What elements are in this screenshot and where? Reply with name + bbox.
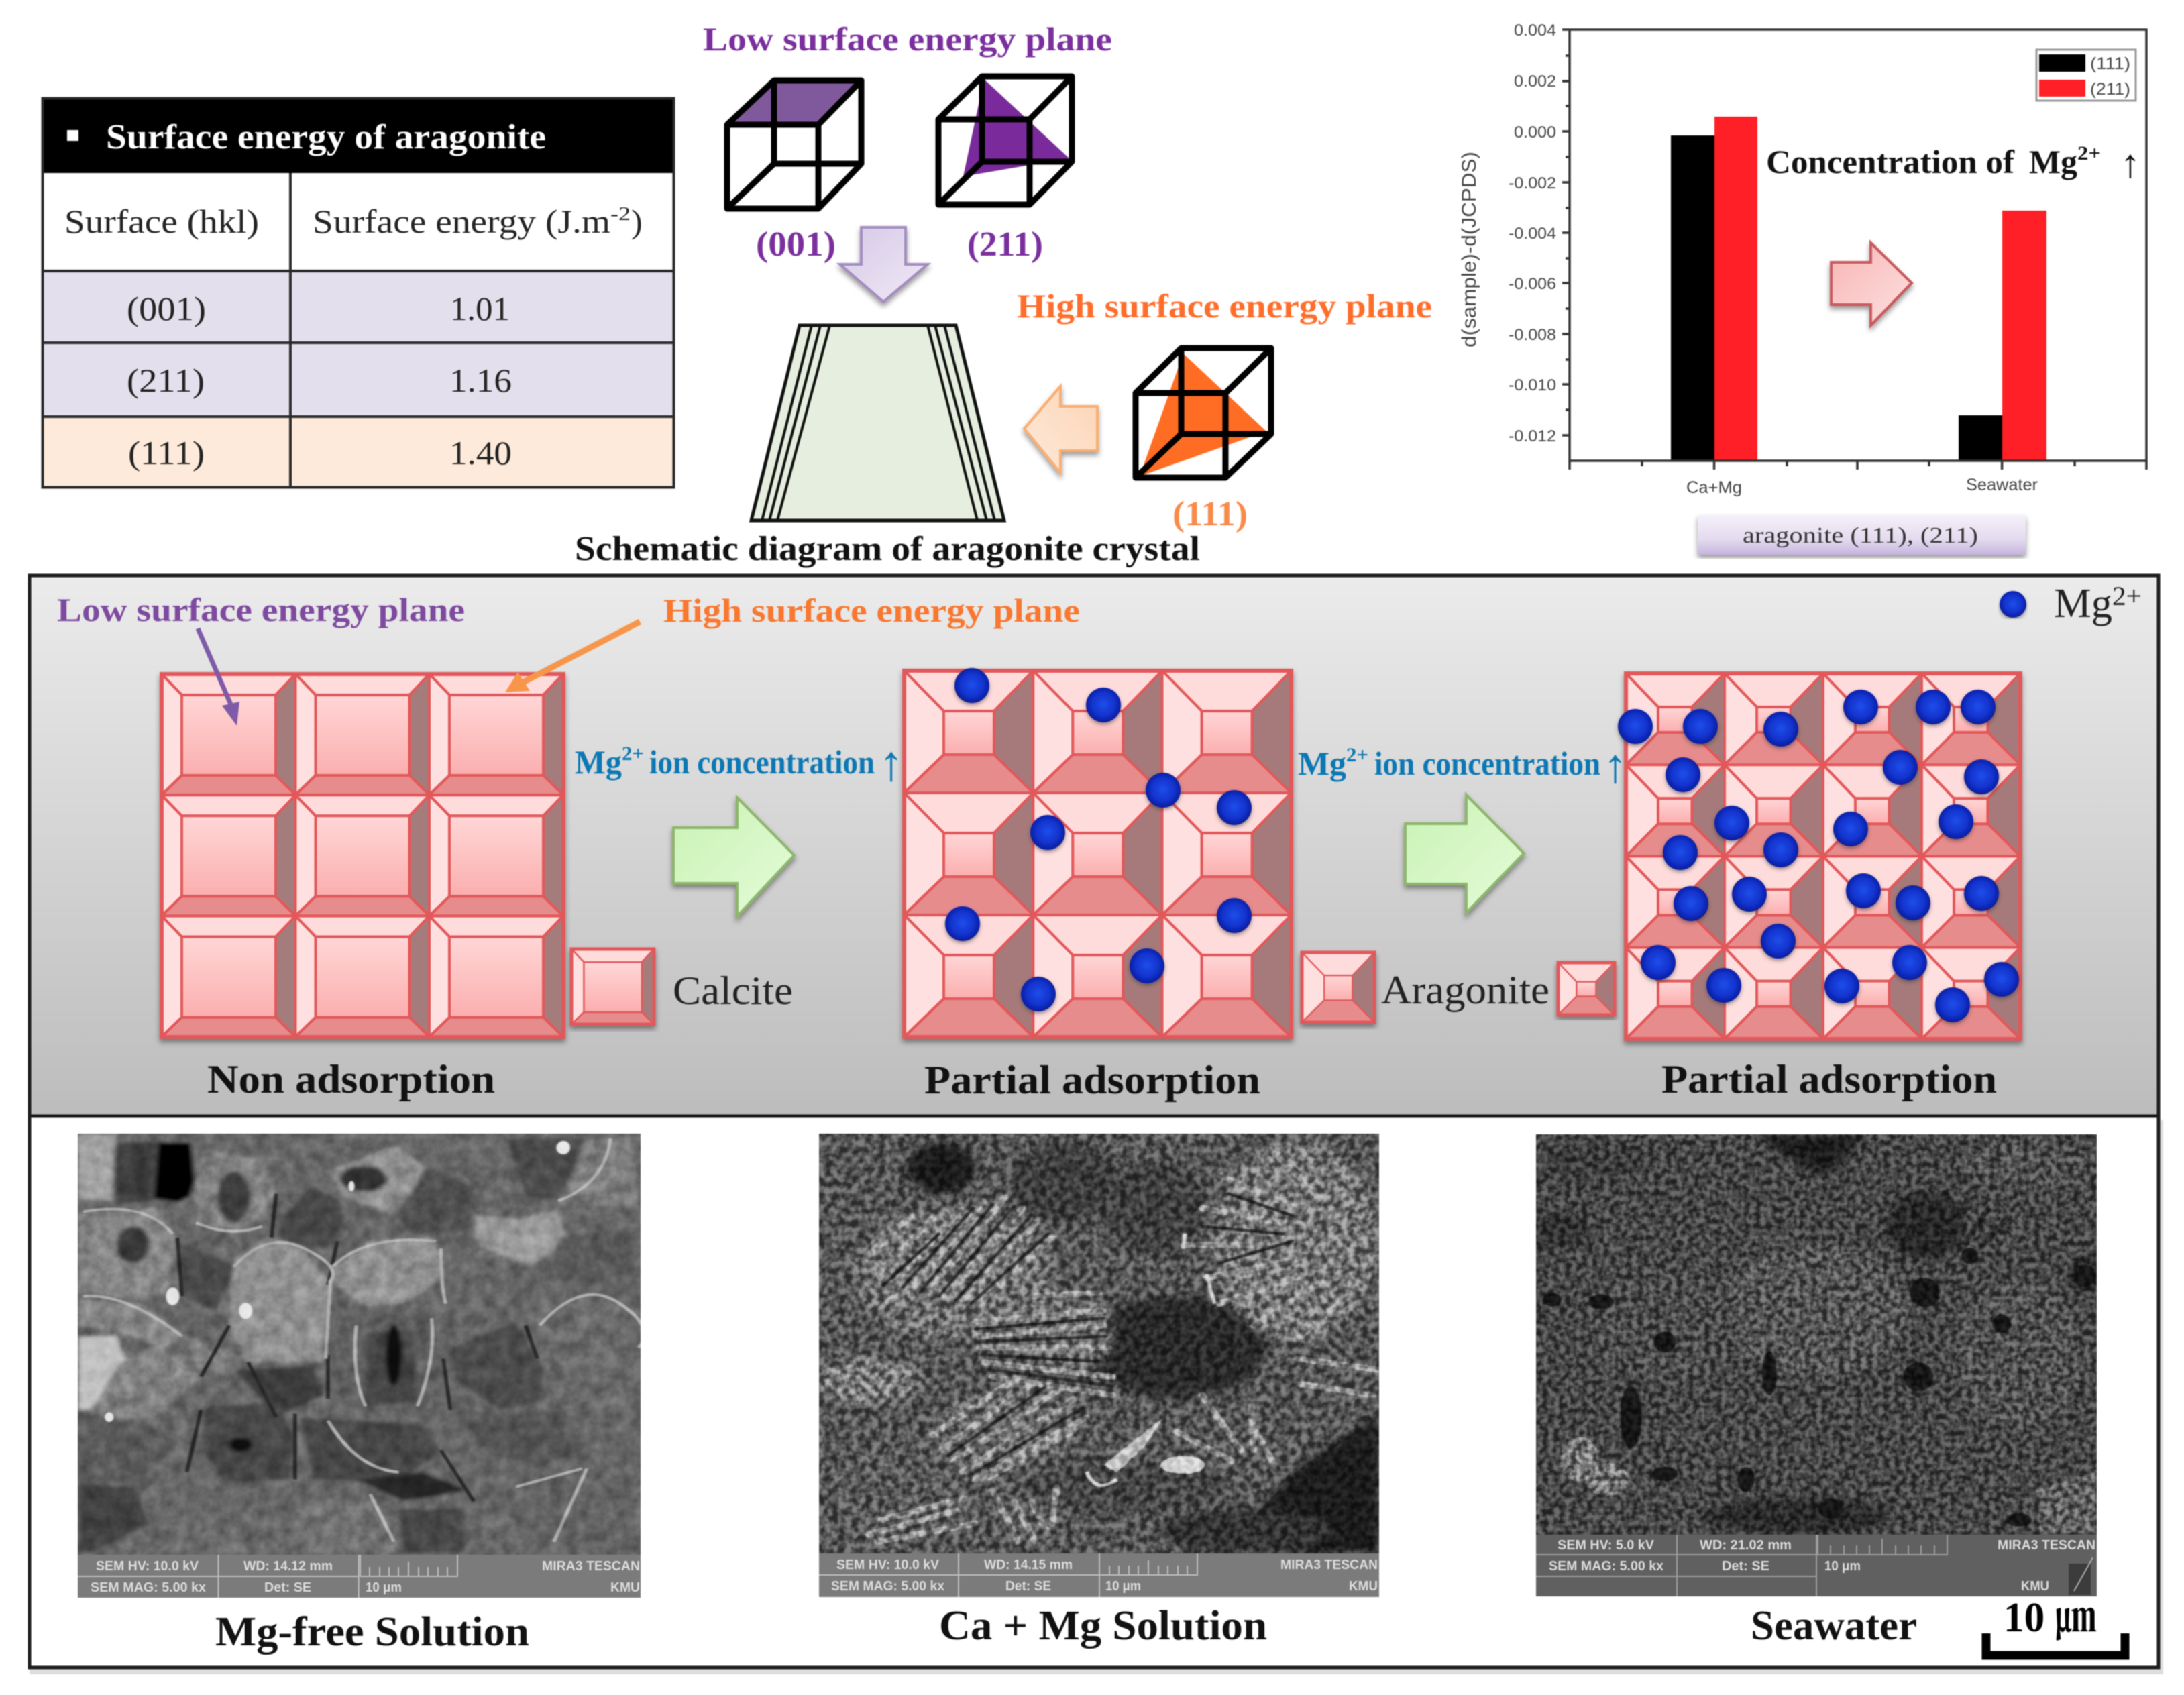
label: low surface energy plane: Low surface energy plane: [57, 591, 465, 628]
SEM image: seawater: [1529, 1134, 2104, 1596]
caption: Ca + Mg solution: Ca + Mg Solution: [939, 1603, 1267, 1649]
table rows: [127, 290, 512, 472]
icon: cube (211): [938, 76, 1072, 205]
x axis labels: Ca+Mg: [1686, 478, 1742, 497]
arrow: purple down: [840, 227, 928, 302]
SEM data bar: 10 μm: [366, 1580, 402, 1595]
callout: aragonite (111), (211): aragonite (111), (211): [1743, 523, 1978, 548]
y axis tick labels: -0.010: [1509, 376, 1556, 394]
table column headings: -2: [610, 204, 631, 225]
SEM data bar: SEM MAG: 5.00 kx: [1549, 1559, 1663, 1574]
y axis tick labels: -0.002: [1509, 174, 1556, 193]
arrow: pink right: [1831, 243, 1912, 325]
table column headings: Surface (hkl): [64, 203, 259, 240]
bar chart: [1458, 21, 2146, 555]
label: Mg2+ ion concentration 2: Mg: [1298, 745, 1346, 782]
tile: calcite unit: [571, 949, 654, 1024]
y axis tick labels: -0.008: [1509, 326, 1556, 344]
SEM data bar: SEM HV: 10.0 kV: [96, 1559, 199, 1574]
y axis tick labels: -0.012: [1509, 427, 1556, 445]
heading: high surface energy plane: High surface energy plane: [1017, 287, 1432, 325]
legend: (111): [2090, 54, 2130, 73]
caption: Mg-free solution: Mg-free Solution: [215, 1609, 529, 1655]
SEM data bar: KMU: [1349, 1579, 1378, 1594]
annotation: concentration of Mg2+: Mg: [2029, 143, 2077, 180]
icon: cube (111): [1136, 348, 1271, 478]
label: calcite: Calcite: [673, 969, 793, 1013]
SEM data bar: 10 μm: [1105, 1579, 1141, 1594]
y axis tick labels: 0.002: [1514, 72, 1556, 91]
label (001): (001): [756, 225, 836, 264]
caption: seawater: Seawater: [1751, 1603, 1917, 1649]
label: Mg2+ ion concentration 1: ion concentration: [649, 743, 875, 781]
SEM data bar: Det: SE: [264, 1580, 311, 1595]
SEM data bar: [819, 1553, 1379, 1597]
annotation: concentration of Mg2+: 2+: [2077, 142, 2101, 164]
annotation: concentration of Mg2+: ↑: [2120, 142, 2140, 186]
SEM data bar: SEM MAG: 5.00 kx: [91, 1580, 206, 1595]
bars: [1671, 117, 2046, 461]
label: Mg2+ ion concentration 1: ↑: [879, 736, 904, 791]
SEM data bar: Det: SE: [1005, 1579, 1051, 1594]
SEM data bar: WD: 21.02 mm: [1700, 1538, 1792, 1553]
icon: cube (001): [727, 80, 861, 209]
x axis labels: Seawater: [1966, 476, 2038, 494]
heading: low surface energy plane: Low surface energy plane: [703, 20, 1112, 58]
SEM data bar: MIRA3 TESCAN: [1280, 1557, 1378, 1572]
SEM data bar: MIRA3 TESCAN: [1998, 1538, 2095, 1553]
legend: Mg2+: 2+: [2112, 581, 2142, 611]
label: Mg2+ ion concentration 1: Mg: [575, 743, 622, 781]
SEM image: Mg-free solution: [78, 1134, 645, 1598]
SEM data bar: SEM HV: 5.0 kV: [1558, 1538, 1655, 1553]
arrow: green right 2: [1405, 795, 1524, 913]
legend: (211): [2090, 80, 2130, 99]
table header: Surface energy of aragonite: [106, 118, 546, 156]
label (211): (211): [967, 225, 1043, 264]
SEM data bar: KMU: [610, 1580, 640, 1595]
panel: adsorption schematics: [30, 576, 2159, 1116]
SEM data bar: SEM MAG: 5.00 kx: [831, 1579, 944, 1594]
SEM data bar: Det: SE: [1722, 1559, 1769, 1574]
SEM data bar: KMU: [2021, 1579, 2049, 1594]
table column headings: Surface energy (J.m: [313, 203, 610, 240]
scale bar: 10 µm: 10 ㎛: [2004, 1595, 2096, 1641]
label: partial adsorption 2: Partial adsorption: [1661, 1057, 1997, 1101]
label: Mg2+ ion concentration 2: 2+: [1346, 744, 1368, 766]
label: Mg2+ ion concentration 2: ↑: [1603, 739, 1627, 793]
SEM data bar: 10 μm: [1824, 1559, 1861, 1574]
annotation: concentration of Mg2+: Concentration of: [1766, 143, 2015, 180]
y axis tick labels: -0.004: [1509, 225, 1556, 243]
tile: aragonite small unit: [1558, 963, 1615, 1015]
panel: SEM micrographs: [30, 1116, 2163, 1674]
SEM image: Ca + Mg solution: [817, 1134, 1379, 1597]
label: aragonite: Aragonite: [1381, 968, 1549, 1012]
y axis tick labels: -0.006: [1509, 275, 1556, 293]
grid: aragonite partial adsorption: [904, 671, 1291, 1037]
tile: aragonite unit: [1302, 952, 1374, 1022]
table column headings: ): [631, 203, 643, 240]
legend: Mg2+: [2000, 581, 2142, 626]
arrow: green right 1: [673, 798, 794, 916]
arrow: orange left: [1024, 386, 1097, 473]
surface energy table: [42, 97, 675, 488]
label: high surface energy plane: High surface energy plane: [663, 592, 1080, 629]
axes: [1562, 30, 2146, 470]
grid: calcite non adsorption: [162, 674, 563, 1037]
label: partial adsorption 1: Partial adsorption: [924, 1058, 1260, 1102]
scale bar: 10 µm: [1986, 1595, 2125, 1655]
icon: aragonite crystal trapezoid: [751, 325, 1004, 521]
SEM data bar: WD: 14.12 mm: [243, 1559, 333, 1574]
SEM data bar: MIRA3 TESCAN: [542, 1559, 640, 1574]
y axis tick labels: [1509, 21, 1556, 445]
legend: [2036, 50, 2136, 101]
table rows: 1.01: [450, 290, 510, 327]
SEM data bar: SEM HV: 10.0 kV: [836, 1557, 940, 1572]
caption: schematic diagram: Schematic diagram of aragonite crystal: [575, 530, 1200, 568]
table rows: (111): [128, 434, 205, 472]
Mg2+ ions on first grid: [945, 668, 1252, 1011]
y axis tick labels: 0.004: [1514, 21, 1556, 40]
arrow: orange pointer: [505, 622, 640, 692]
SEM data bar: WD: 14.15 mm: [984, 1557, 1073, 1572]
label (111): (111): [1172, 495, 1248, 533]
arrow: purple pointer: [198, 628, 239, 726]
label: Mg2+ ion concentration 2: ion concentration: [1374, 745, 1600, 782]
table rows: (001): [127, 290, 206, 327]
SEM data bar: [1536, 1535, 2097, 1596]
label: Mg2+ ion concentration 1: 2+: [622, 743, 644, 765]
y axis tick labels: 0.000: [1514, 123, 1556, 142]
grid: aragonite dense adsorption: [1626, 673, 2020, 1039]
table rows: (211): [127, 362, 205, 399]
Mg2+ ions on second grid: [1618, 690, 2019, 1022]
callout: aragonite (111), (211): [1698, 515, 2026, 555]
y axis title: d(sample)-d(JCPDS): [1458, 152, 1480, 347]
x axis labels: [1686, 476, 2038, 497]
table rows: 1.16: [449, 362, 512, 399]
table column headings: [64, 203, 643, 240]
label: non adsorption: Non adsorption: [207, 1057, 495, 1101]
SEM data bar: [78, 1555, 641, 1598]
table rows: 1.40: [449, 434, 512, 472]
legend: Mg2+: Mg: [2054, 581, 2112, 626]
